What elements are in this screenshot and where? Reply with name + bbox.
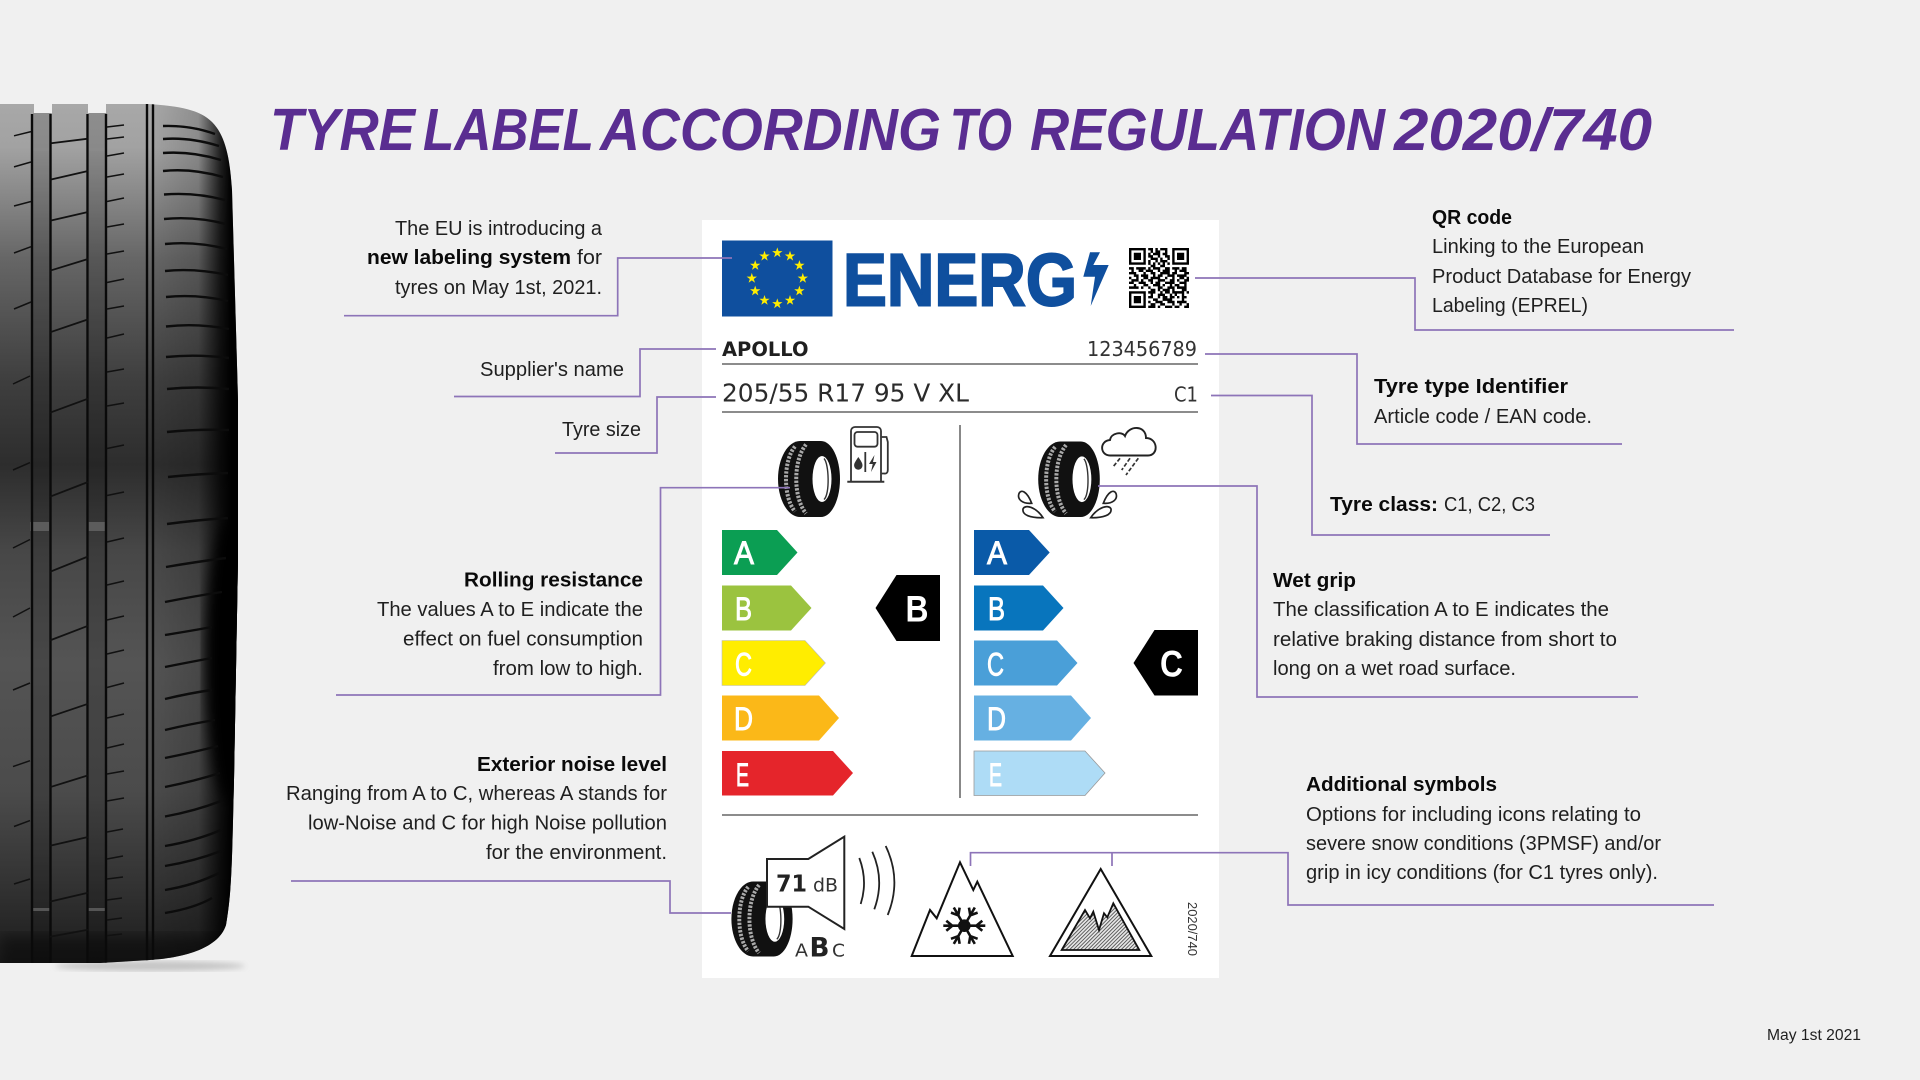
text block: additional symbols: Additional symbols — [1306, 773, 1497, 796]
text block: exterior noise level — [286, 753, 667, 864]
text block: new labeling system: for — [577, 246, 602, 269]
text block: additional symbols: Options for including icons relating to — [1306, 803, 1641, 826]
title: TO — [950, 97, 1012, 163]
leader line: QR code — [1195, 278, 1734, 330]
icon: tyre with rain — [1019, 428, 1156, 518]
tyre size value: 205/55 R17 95 V XL — [722, 379, 969, 408]
rating badge B: B — [906, 588, 928, 630]
text block: tyre type identifier — [1374, 375, 1592, 428]
tyre class value: C1 — [1174, 383, 1198, 407]
arrow B: B — [735, 591, 752, 627]
icon: noise tyre and speaker — [731, 837, 894, 964]
icon: noise tyre and speaker: dB — [813, 875, 838, 897]
text block: rolling resistance: The values A to E indicate the — [377, 598, 643, 621]
supplier name: APOLLO — [722, 338, 808, 361]
text block: QR code: Product Database for Energy — [1432, 265, 1692, 288]
text block: QR code — [1432, 206, 1692, 317]
text block: QR code: Linking to the European — [1432, 235, 1644, 258]
text block: supplier's name: Supplier's name — [480, 358, 624, 381]
text block: exterior noise level: low-Noise and C for high Noise pollution — [308, 812, 667, 834]
text block: new labeling system: tyres on May 1st, 2021. — [395, 276, 602, 299]
rating badge C: C — [1160, 644, 1183, 685]
arrow A: A — [987, 535, 1008, 571]
text block: tyre class — [1330, 493, 1535, 516]
text block: new labeling system: The EU is introducing a — [395, 217, 603, 240]
text block: tyre size: Tyre size — [562, 418, 641, 441]
arrow E: E — [736, 757, 749, 793]
arrow A: A — [734, 535, 755, 571]
arrow E — [974, 751, 1105, 796]
text block: QR code: QR code — [1432, 206, 1512, 229]
arrow A — [722, 530, 798, 575]
arrow D — [974, 696, 1091, 740]
icon: three-peak mountain snowflake — [912, 862, 1013, 956]
text block: tyre type identifier: Tyre type Identifier — [1374, 375, 1568, 398]
text block: tyre class: Tyre class: — [1330, 493, 1438, 516]
rating badge B — [876, 575, 940, 641]
panel: energy label — [702, 220, 1219, 978]
arrow C: C — [987, 646, 1004, 682]
title: LABEL — [423, 97, 594, 163]
leader line: additional symbols — [970, 853, 1714, 905]
leader line: exterior noise — [291, 881, 731, 913]
icon: noise tyre and speaker: B — [810, 933, 830, 964]
tyre type identifier value: 123456789 — [1087, 337, 1197, 361]
text block: exterior noise level: for the environment. — [486, 841, 667, 864]
title — [270, 97, 1652, 163]
leader line: wet grip — [1098, 486, 1638, 697]
text block: additional symbols — [1306, 773, 1661, 884]
arrow D: D — [734, 701, 753, 737]
arrow E — [722, 751, 853, 796]
text block: wet grip — [1273, 569, 1617, 680]
text block: wet grip: The classification A to E indicates the — [1273, 598, 1609, 621]
arrow B — [974, 586, 1064, 630]
text block: wet grip: Wet grip — [1273, 569, 1356, 592]
arrow C: C — [735, 646, 752, 682]
icon: ice grip mountain — [1050, 869, 1151, 956]
text block: exterior noise level: Ranging from A to C, whereas A stands for — [286, 782, 667, 805]
leader line: rolling resistance — [336, 488, 790, 695]
chart: wet grip scale — [974, 530, 1105, 796]
icon: noise tyre and speaker: C — [832, 941, 845, 962]
icon: EU flag — [722, 240, 832, 316]
text block: additional symbols: grip in icy conditions (for C1 tyres only). — [1306, 861, 1658, 884]
text block: tyre class: C1, C2, C3 — [1444, 493, 1535, 516]
text block: tyre type identifier: Article code / EAN code. — [1374, 405, 1592, 428]
text block: additional symbols: severe snow conditions (3PMSF) and/or — [1306, 832, 1661, 855]
arrow E: E — [989, 757, 1002, 793]
leader line: tyre size — [555, 397, 716, 453]
title: TYRE — [270, 97, 417, 163]
arrow D — [722, 696, 839, 740]
arrow C — [974, 640, 1078, 686]
leader line: tyre type identifier — [1205, 354, 1622, 444]
title: REGULATION — [1030, 97, 1386, 163]
text block: rolling resistance: effect on fuel consumption — [403, 628, 643, 650]
date: May 1st 2021 — [1767, 1027, 1861, 1044]
title: ACCORDING — [598, 97, 941, 163]
leader line: new label — [344, 258, 732, 316]
leader line: tyre class — [1211, 396, 1550, 535]
text block: rolling resistance: from low to high. — [493, 657, 643, 680]
text block: new labeling system — [367, 217, 603, 299]
rating badge C — [1134, 630, 1198, 696]
arrow C — [722, 640, 826, 686]
energy wordmark: ENERG — [843, 239, 1077, 322]
text block: QR code: Labeling (EPREL) — [1432, 294, 1588, 317]
arrow D: D — [987, 701, 1006, 737]
text block: rolling resistance: Rolling resistance — [464, 569, 643, 592]
icon: noise tyre and speaker: A — [795, 941, 809, 962]
title: 2020/740 — [1393, 97, 1652, 163]
text block: wet grip: relative braking distance from short to — [1273, 628, 1617, 651]
arrow A — [974, 530, 1050, 575]
arrow B: B — [988, 591, 1005, 627]
text block: new labeling system: new labeling system — [367, 246, 571, 269]
text block: wet grip: long on a wet road surface. — [1273, 657, 1516, 680]
tyre photograph — [0, 100, 258, 975]
text block: exterior noise level: Exterior noise level — [477, 753, 667, 776]
chart: rolling resistance scale — [722, 530, 853, 796]
icon: tyre with fuel pump — [778, 427, 888, 517]
icon: noise tyre and speaker: 71 — [776, 872, 807, 898]
icon: QR code — [1129, 248, 1189, 308]
regulation number: 2020/740 — [1185, 902, 1200, 956]
text block: rolling resistance — [377, 569, 643, 680]
leader line: supplier name — [454, 349, 716, 396]
arrow B — [722, 586, 812, 630]
